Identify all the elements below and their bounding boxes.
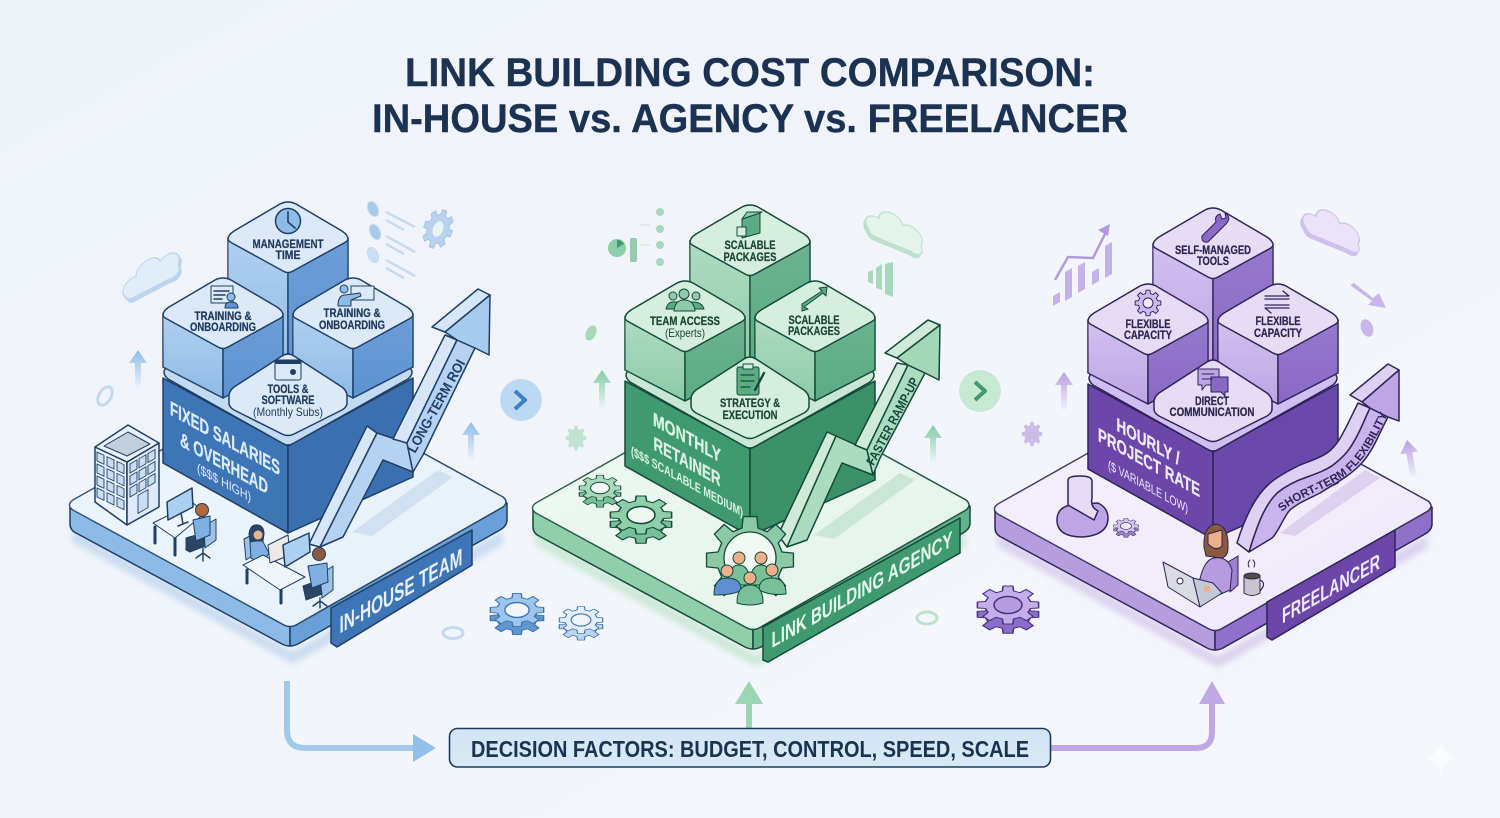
freelancer with laptop bbox=[1163, 524, 1238, 607]
ribbon: freelancer: FREELANCER bbox=[1282, 550, 1380, 629]
label: team access: (Experts) bbox=[665, 326, 705, 340]
icon: presenter at board bbox=[338, 285, 374, 306]
label: self-managed tools: TOOLS bbox=[1197, 254, 1229, 268]
label: monthly retainer: ($$$ SCALABLE MEDIUM) bbox=[631, 443, 743, 520]
small gear bbox=[1022, 422, 1042, 446]
ribbon: freelancer bbox=[1267, 530, 1395, 640]
icon: document with person bbox=[211, 286, 238, 308]
label: training right bbox=[319, 306, 385, 332]
faded arrow bbox=[1350, 283, 1386, 308]
icon: double arrow bbox=[802, 287, 827, 311]
label: tools and software: (Monthly Subs) bbox=[253, 405, 323, 419]
ring bbox=[443, 628, 463, 638]
chevron: in-house to agency bbox=[500, 379, 542, 421]
icon: swap arrows bbox=[1265, 291, 1289, 313]
label: flexible capacity left: CAPACITY bbox=[1124, 328, 1172, 342]
label: training right: ONBOARDING bbox=[319, 318, 385, 332]
sparkle bbox=[1425, 742, 1457, 776]
block stack bbox=[163, 202, 413, 533]
label: self-managed tools bbox=[1175, 243, 1251, 268]
label: fixed salaries bbox=[170, 397, 280, 505]
label: team access bbox=[650, 314, 720, 340]
ring bbox=[95, 384, 115, 408]
label: hourly project rate bbox=[1098, 415, 1200, 516]
arrow shadow on platform bbox=[352, 470, 453, 536]
arrow: long-term ROI bbox=[309, 289, 490, 547]
label: tools and software: TOOLS & bbox=[268, 382, 309, 396]
label: fixed salaries: FIXED SALARIES bbox=[170, 397, 280, 480]
ribbon: link building agency bbox=[763, 518, 960, 662]
label: hourly project rate: ($ VARIABLE LOW) bbox=[1108, 457, 1188, 516]
icon: browser window bbox=[275, 360, 301, 380]
label: monthly retainer: RETAINER bbox=[654, 434, 721, 491]
platform gears bbox=[579, 475, 672, 543]
up arrow bbox=[129, 350, 147, 388]
label: scalable packages right: SCALABLE bbox=[788, 313, 840, 327]
arrow shadow on platform bbox=[1280, 470, 1380, 536]
label: flexible capacity right: CAPACITY bbox=[1254, 326, 1302, 340]
icon: office building bbox=[95, 425, 159, 525]
panel: freelancer bbox=[994, 207, 1433, 669]
label: training left: TRAINING & bbox=[194, 309, 252, 323]
label: training right: TRAINING & bbox=[324, 306, 381, 320]
arrow: faster ramp-up bbox=[778, 320, 940, 547]
flow arrow: in-house to decision factors bbox=[287, 681, 436, 762]
small badge bbox=[1358, 317, 1376, 339]
icon: wrench bbox=[1202, 213, 1229, 242]
panel: link building agency bbox=[532, 200, 970, 667]
bust figure bbox=[1057, 476, 1108, 537]
floating list icon bbox=[365, 200, 415, 278]
icon: team bbox=[666, 289, 704, 311]
label: flexible capacity left bbox=[1124, 317, 1172, 342]
icon: gear bbox=[1135, 290, 1161, 316]
platform bbox=[70, 380, 507, 664]
arrow: short-term flexibility: SHORT-TERM FLEXIBILITY bbox=[1278, 411, 1386, 511]
flow icon bbox=[608, 208, 664, 266]
workstation: desk and person bbox=[153, 488, 216, 561]
label: hourly project rate: HOURLY / bbox=[1117, 415, 1180, 470]
label: training left: ONBOARDING bbox=[190, 320, 256, 334]
label: monthly retainer: MONTHLY bbox=[653, 409, 721, 468]
icon: cube bbox=[737, 212, 762, 238]
ribbon: in-house team: IN-HOUSE TEAM bbox=[340, 544, 462, 639]
title: LINK BUILDING COST COMPARISON: bbox=[405, 51, 1095, 95]
gear: before freelancer bbox=[977, 586, 1039, 633]
label: scalable packages right bbox=[788, 313, 840, 338]
label: scalable packages top: PACKAGES bbox=[724, 250, 776, 264]
label: fixed salaries: ($$$ HIGH) bbox=[197, 460, 251, 505]
label: strategy and execution bbox=[720, 396, 780, 422]
mini bar icon bbox=[868, 262, 893, 297]
label: flexible capacity left: FLEXIBLE bbox=[1126, 317, 1170, 331]
workstation: shared desk with two people bbox=[243, 525, 333, 608]
platform bbox=[994, 384, 1432, 668]
up arrow bbox=[1055, 372, 1073, 410]
label: scalable packages top bbox=[724, 238, 776, 264]
label: flexible capacity right bbox=[1254, 314, 1302, 340]
label: flexible capacity right: FLEXIBLE bbox=[1256, 314, 1300, 328]
up arrow bbox=[1398, 438, 1422, 479]
arrow shadow on platform bbox=[814, 473, 915, 539]
block stack bbox=[625, 205, 875, 536]
up arrow bbox=[462, 422, 480, 460]
leaf dot bbox=[583, 324, 599, 342]
label: direct communication bbox=[1170, 394, 1254, 419]
gears: between in-house and agency bbox=[490, 593, 603, 640]
decision factors box bbox=[450, 728, 1050, 767]
label: fixed salaries: & OVERHEAD bbox=[180, 428, 268, 499]
icon: clock bbox=[276, 208, 300, 234]
arrow: short-term flexibility bbox=[1236, 363, 1400, 553]
label: direct communication: COMMUNICATION bbox=[1170, 405, 1254, 419]
label: scalable packages right: PACKAGES bbox=[788, 324, 840, 338]
title: IN-HOUSE vs. AGENCY vs. FREELANCER bbox=[372, 97, 1128, 141]
label: strategy and execution: STRATEGY & bbox=[720, 396, 780, 410]
label: management time: TIME bbox=[276, 248, 300, 262]
growth chart bbox=[1053, 224, 1112, 306]
chevron: agency to freelancer bbox=[959, 370, 1001, 412]
floating gear bbox=[418, 206, 458, 252]
cloud bbox=[864, 200, 922, 263]
label: tools and software: SOFTWARE bbox=[262, 393, 314, 407]
label: training left bbox=[190, 309, 256, 334]
flow arrow: decision factors to agency bbox=[735, 681, 763, 730]
label: direct communication: DIRECT bbox=[1195, 394, 1230, 408]
up arrow bbox=[924, 425, 942, 463]
label: self-managed tools: SELF-MANAGED bbox=[1175, 243, 1251, 257]
ribbon: link building agency: LINK BUILDING AGENCY bbox=[772, 527, 953, 654]
ribbon: in-house team bbox=[331, 530, 472, 647]
panel: in-house team bbox=[70, 200, 507, 664]
small gear bbox=[566, 426, 586, 450]
cloud bbox=[123, 244, 181, 307]
ring bbox=[917, 612, 937, 624]
platform bbox=[532, 384, 970, 667]
cloud bbox=[1301, 198, 1359, 261]
label: management time: MANAGEMENT bbox=[252, 237, 324, 251]
label: management time bbox=[252, 237, 324, 262]
label: scalable packages top: SCALABLE bbox=[724, 238, 776, 252]
small platform gear bbox=[1114, 518, 1138, 537]
coffee cup bbox=[1244, 560, 1264, 596]
flow arrow: decision factors to freelancer bbox=[1050, 681, 1225, 748]
label: team access: TEAM ACCESS bbox=[650, 314, 720, 328]
block stack bbox=[1088, 208, 1338, 539]
title bbox=[372, 51, 1128, 141]
label: strategy and execution: EXECUTION bbox=[722, 408, 778, 422]
label: hourly project rate: PROJECT RATE bbox=[1098, 425, 1200, 502]
label: tools and software bbox=[253, 382, 323, 419]
icon: chat bubbles bbox=[1198, 369, 1228, 396]
arrow: long-term ROI: LONG-TERM ROI bbox=[404, 357, 468, 455]
label: monthly retainer bbox=[631, 409, 743, 520]
icon: clipboard bbox=[737, 364, 764, 395]
decision factors box: DECISION FACTORS: BUDGET, CONTROL, SPEED, SCALE bbox=[471, 736, 1029, 762]
arrow: faster ramp-up: FASTER RAMP-UP bbox=[863, 375, 922, 468]
up arrow bbox=[593, 370, 611, 408]
icon: team gear bbox=[707, 517, 793, 605]
